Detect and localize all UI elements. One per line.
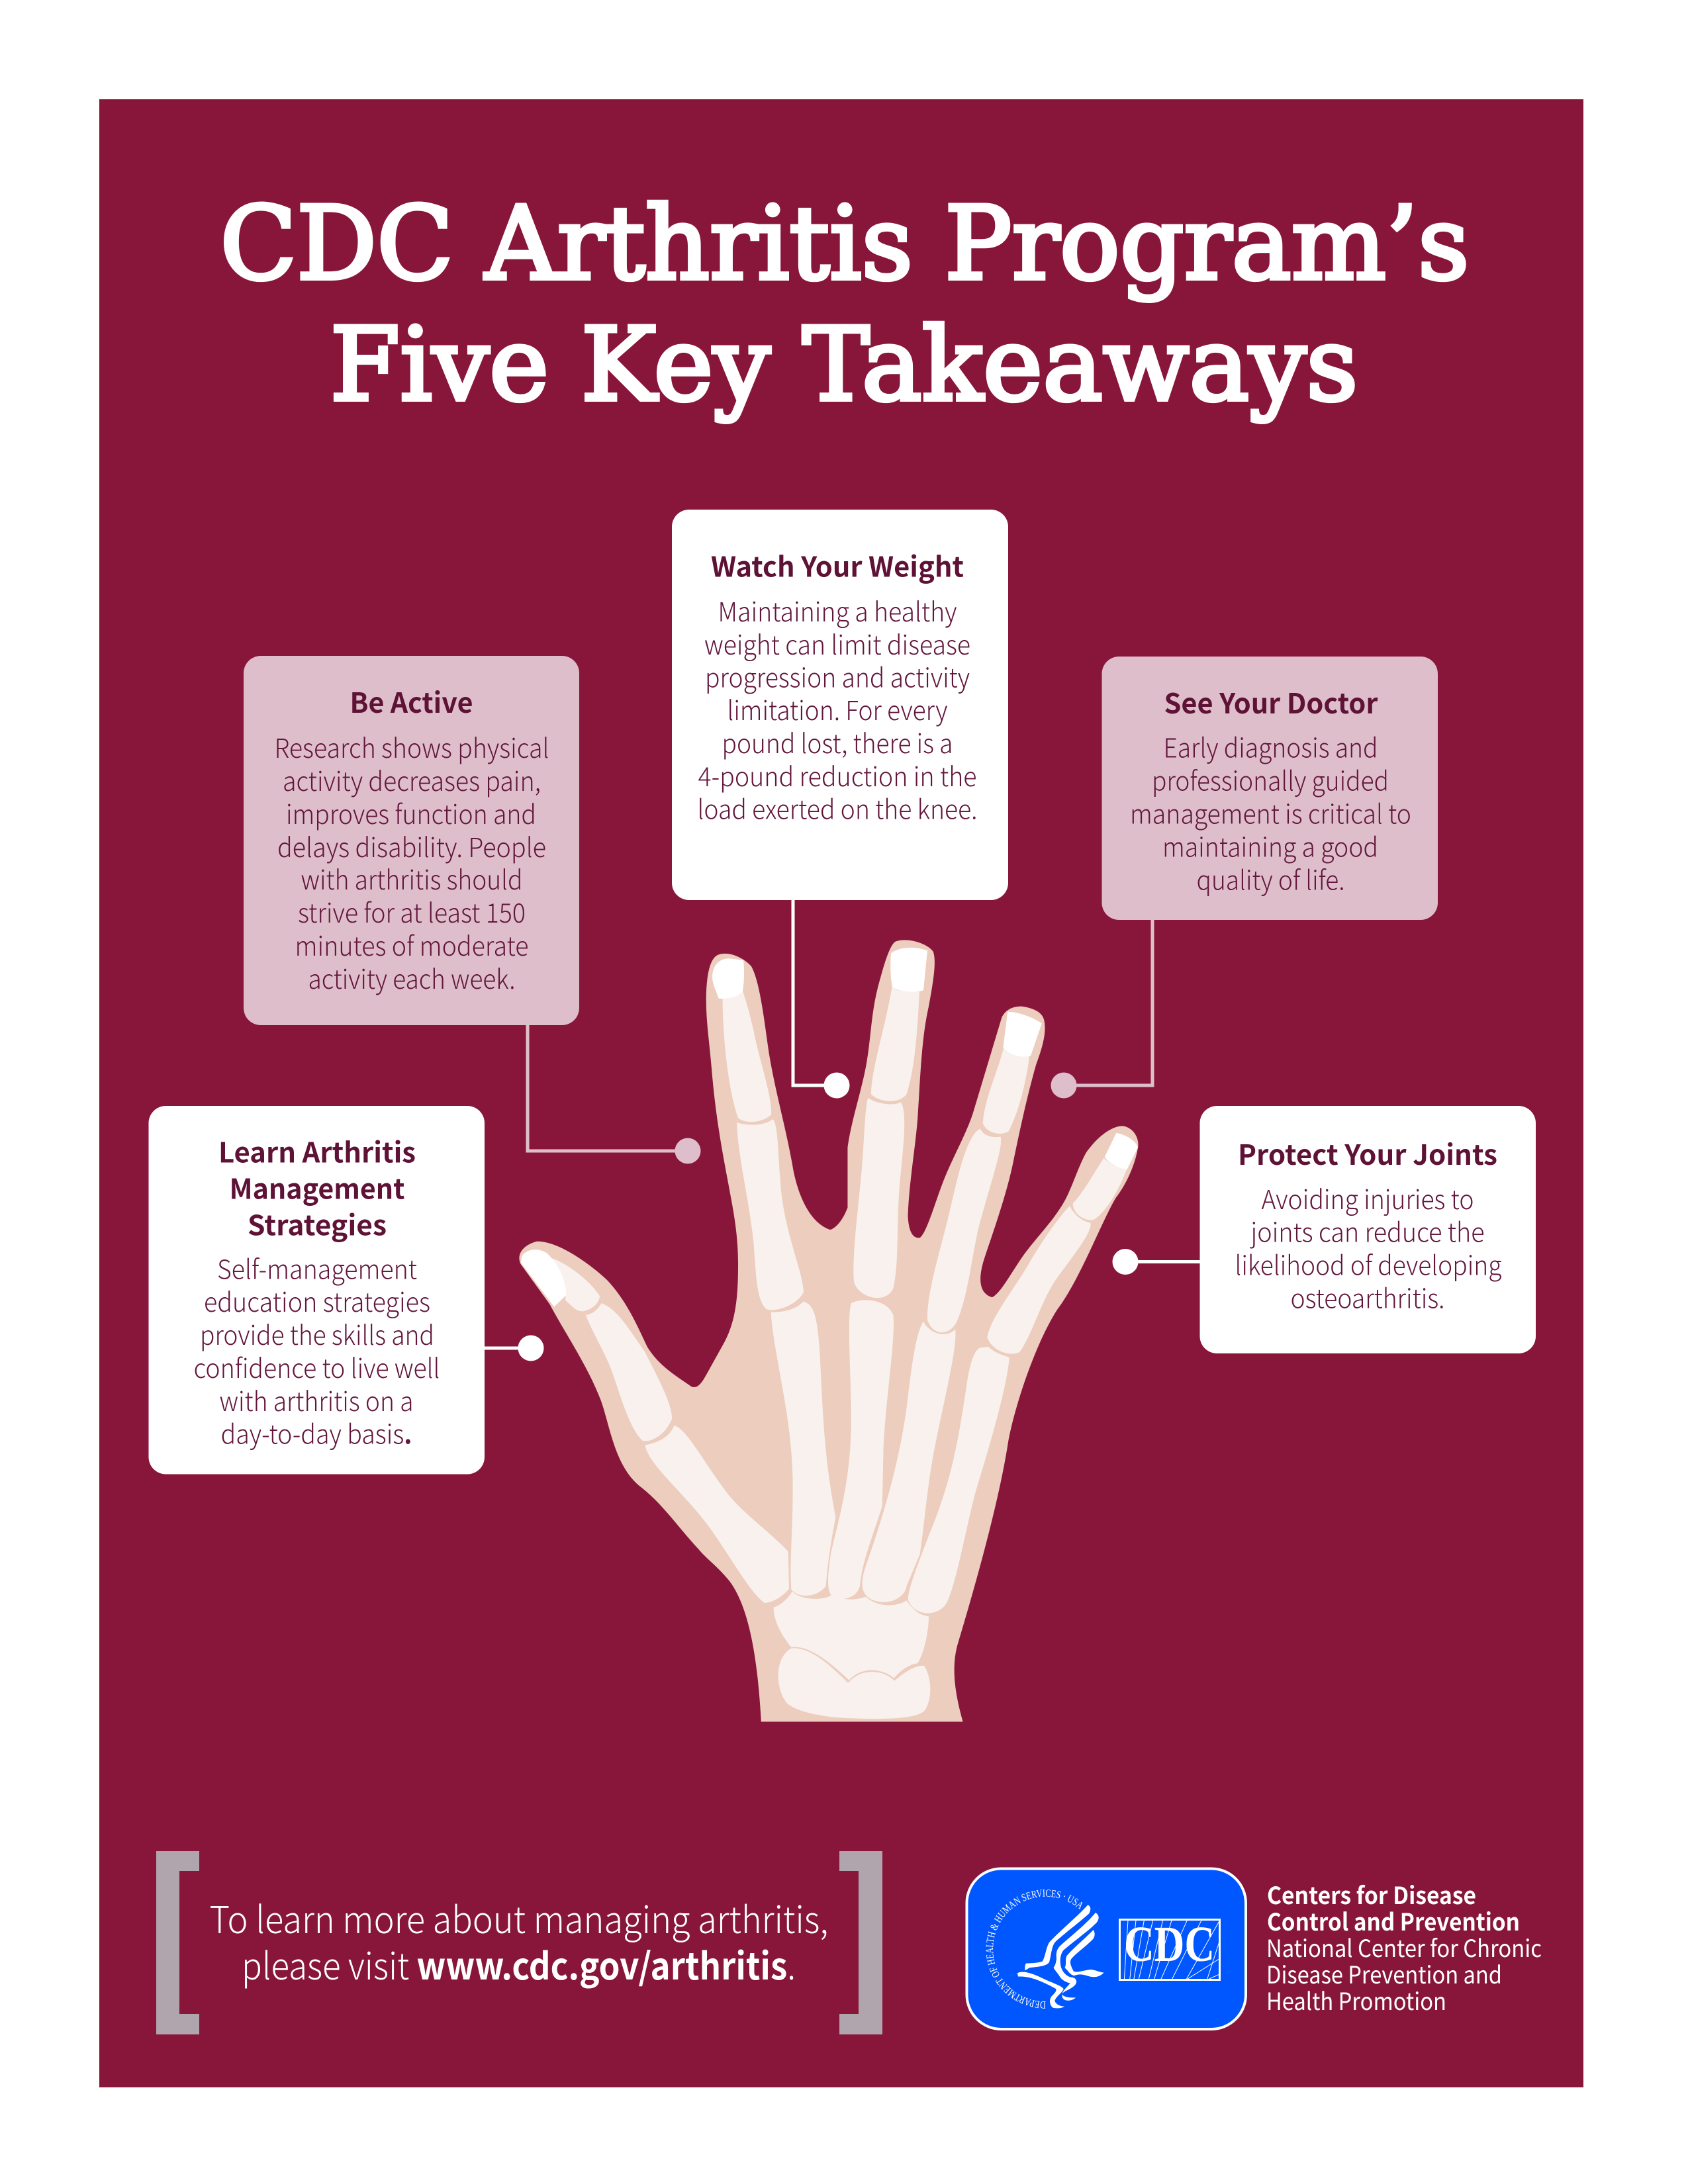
right bracket — [839, 1851, 882, 2034]
panel: See Your Doctor: professionally guided — [1152, 760, 1389, 798]
panel: See Your Doctor: quality of life. — [1197, 859, 1345, 897]
panel: Protect Your Joints: Protect Your Joints — [1238, 1133, 1497, 1173]
hand skeleton illustration — [519, 940, 1138, 1721]
call to action text: To learn more about managing arthritis, — [209, 1891, 829, 1944]
panel: Be Active: Research shows physical — [274, 727, 549, 766]
panel: Be Active: activity decreases pain, — [283, 760, 541, 799]
title: CDC Arthritis Program’s — [220, 185, 1470, 303]
panel: Watch Your Weight — [672, 510, 1008, 900]
hand silhouette — [519, 940, 1138, 1721]
panel: Learn Arthritis Management Strategies: Self-management — [217, 1248, 417, 1287]
title — [220, 185, 1470, 424]
panel: Learn Arthritis Management Strategies: Management — [229, 1167, 405, 1207]
organization name text: Control and Prevention — [1267, 1903, 1520, 1938]
panel: Protect Your Joints: osteoarthritis. — [1291, 1277, 1444, 1316]
organization name text: Health Promotion — [1266, 1983, 1446, 2017]
organization name text: National Center for Chronic — [1266, 1930, 1542, 1964]
panel: Be Active: strive for at least 150 — [298, 892, 526, 931]
panel: Watch Your Weight: limitation. For every — [727, 690, 948, 728]
call to action text — [209, 1891, 829, 1991]
panel: Learn Arthritis Management Strategies: Strategies — [248, 1203, 387, 1244]
panel: See Your Doctor: Early diagnosis and — [1164, 727, 1378, 765]
connector: See Your Doctor to dot — [1051, 920, 1152, 1099]
panel: Watch Your Weight: 4-pound reduction in the — [698, 756, 977, 794]
panel: Be Active — [244, 656, 579, 1025]
panel: Watch Your Weight: Watch Your Weight — [711, 545, 964, 585]
panel: Protect Your Joints: Avoiding injuries to — [1262, 1179, 1474, 1217]
panel: Learn Arthritis Management Strategies: provide the skills and — [200, 1314, 434, 1353]
panel: See Your Doctor: See Your Doctor — [1164, 682, 1378, 722]
logo: HHS and CDC — [965, 1868, 1247, 2030]
call to action text: please visit www.cdc.gov/arthritis. — [242, 1937, 796, 1991]
panel: See Your Doctor — [1102, 657, 1438, 920]
panel: Be Active: delays disability. People — [277, 827, 546, 865]
icon: CDC logo box: CDC — [1124, 1917, 1215, 1972]
panel: Watch Your Weight: load exerted on the knee. — [698, 789, 977, 827]
panel: Learn Arthritis Management Strategies: day-to-day basis. — [221, 1414, 412, 1452]
bones — [551, 988, 1127, 1719]
panel: Learn Arthritis Management Strategies: Learn Arthritis — [218, 1130, 416, 1171]
panel: Learn Arthritis Management Strategies: with arthritis on a — [220, 1381, 413, 1419]
panel: See Your Doctor: maintaining a good — [1162, 826, 1378, 864]
fingernails — [521, 948, 1138, 1307]
panel: Be Active: Be Active — [350, 681, 473, 721]
panel: Watch Your Weight: pound lost, there is a — [722, 723, 953, 761]
panel: Watch Your Weight: weight can limit disease — [704, 624, 970, 662]
connector: Protect Your Joints to dot — [1112, 1249, 1200, 1275]
call to action with brackets — [156, 1851, 882, 2034]
organization name text: Disease Prevention and — [1266, 1956, 1502, 1991]
panel: Watch Your Weight: Maintaining a healthy — [718, 591, 957, 629]
connector: Watch Your Weight to dot — [793, 900, 850, 1099]
icon: HHS seal: DEPARTMENT OF HEALTH & HUMAN SERVICES · USA — [986, 1889, 1083, 2009]
title: Five Key Takeaways — [330, 306, 1358, 424]
connector: Be Active to dot — [528, 1025, 700, 1163]
panel: Be Active: activity each week. — [308, 958, 515, 997]
panel: Learn Arthritis Management Strategies: confidence to live well — [193, 1347, 440, 1386]
panel: Protect Your Joints: joints can reduce the — [1250, 1211, 1484, 1250]
left bracket — [156, 1851, 199, 2034]
connector: Learn Arthritis to dot — [485, 1336, 544, 1361]
panel: Watch Your Weight: progression and activity — [705, 657, 970, 695]
panel: Be Active: with arthritis should — [301, 859, 523, 897]
panel: Learn Arthritis Management Strategies: education strategies — [204, 1281, 430, 1320]
panel: Protect Your Joints — [1199, 1106, 1536, 1353]
panel: Be Active: minutes of moderate — [295, 925, 528, 964]
organization name text — [1266, 1877, 1542, 2017]
panel: See Your Doctor: management is critical to — [1130, 793, 1411, 831]
organization name text: Centers for Disease — [1267, 1877, 1476, 1911]
panel: Be Active: improves function and — [286, 794, 536, 832]
panel: Protect Your Joints: likelihood of developing — [1235, 1244, 1502, 1283]
panel: Learn Arthritis Management Strategies — [148, 1106, 485, 1475]
